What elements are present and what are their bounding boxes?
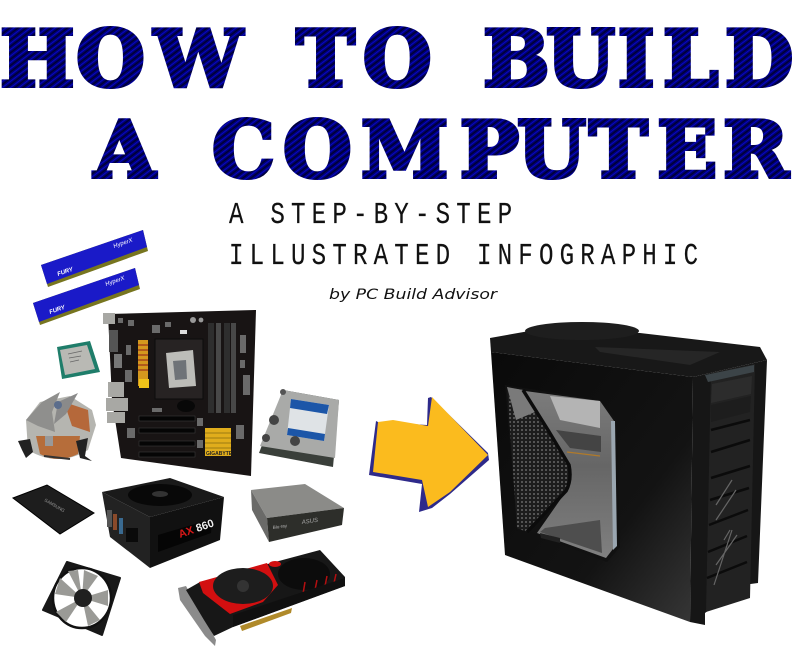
arrow body (373, 397, 488, 507)
VRM yellow heatsink (138, 340, 148, 386)
window mesh (507, 387, 570, 532)
icon: power supply: AX 860 (177, 518, 216, 541)
icon: PC case (490, 322, 767, 625)
subtitle line 1: A STEP-BY-STEP (229, 198, 518, 233)
front panel (690, 360, 767, 625)
case window (505, 385, 620, 562)
icon: optical drive (251, 484, 344, 542)
icon: RAM stick 1: FURY (57, 267, 75, 278)
arrow (369, 397, 489, 512)
gold connector (240, 608, 292, 631)
DIMM slots (208, 323, 236, 413)
PCIe slots (139, 416, 195, 457)
icon: optical drive: Blu-ray (272, 523, 288, 530)
icon: CPU (57, 341, 100, 379)
icon: RAM stick 2: HyperX (105, 275, 127, 288)
small components (177, 400, 195, 412)
card body (186, 550, 345, 636)
side panel (491, 352, 693, 622)
arrow shadow (369, 397, 489, 512)
title (0, 12, 793, 196)
icon: SSD: SAMSUNG (44, 498, 66, 513)
icon: CPU cooler (18, 392, 96, 461)
byline: by PC Build Advisor (329, 287, 499, 303)
icon: RAM stick 2: FURY (49, 305, 67, 316)
subtitle (229, 198, 704, 274)
icon: graphics card (178, 550, 345, 646)
icon: SSD (13, 485, 94, 534)
chipset heatsink (205, 428, 231, 456)
title line 1: HOW TO BUILD (0, 12, 793, 105)
icon: RAM stick 2 (33, 268, 140, 325)
icon: RAM stick 1 (41, 230, 148, 287)
rear ports (103, 313, 128, 423)
icon: power supply (102, 478, 224, 568)
CPU socket (155, 339, 203, 399)
subtitle line 2: ILLUSTRATED INFOGRAPHIC (229, 239, 704, 274)
metal bracket (178, 586, 216, 646)
icon: motherboard: GIGABYTE (206, 451, 233, 457)
icon: hard disk drive (259, 389, 339, 467)
title line 2: A COMPUTER (93, 103, 789, 196)
case top (490, 330, 767, 377)
icon: RAM stick 1: HyperX (113, 237, 135, 250)
icon: motherboard (103, 310, 256, 476)
icon: optical drive: ASUS (300, 518, 318, 526)
icon: case fan (43, 562, 120, 635)
